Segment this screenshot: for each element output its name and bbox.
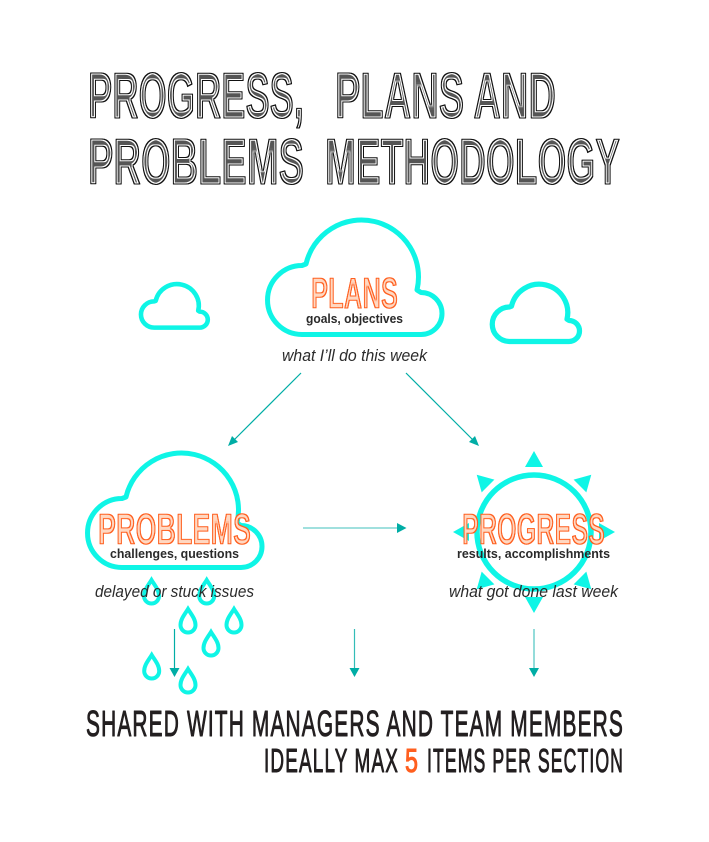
title: PLANS AND bbox=[335, 59, 556, 132]
title: PROBLEMS bbox=[88, 125, 304, 198]
title bbox=[88, 59, 620, 198]
arrow: plans to problems bbox=[228, 373, 301, 446]
progress description: what got done last week bbox=[449, 583, 619, 601]
icon: problems cloud bbox=[88, 453, 262, 568]
footer note: 5 bbox=[405, 742, 418, 779]
plans description: what I’ll do this week bbox=[282, 347, 428, 365]
footer note: IDEALLY MAX bbox=[264, 742, 399, 779]
progress subtitle: results, accomplishments bbox=[457, 547, 610, 561]
plans subtitle: goals, objectives bbox=[306, 312, 403, 326]
arrow: plans to progress bbox=[406, 373, 479, 446]
arrow: down from center bbox=[350, 629, 360, 677]
arrow: problems to progress bbox=[303, 523, 406, 533]
problems subtitle: challenges, questions bbox=[110, 547, 239, 561]
plans heading: PLANS bbox=[311, 269, 398, 318]
panel: progress bbox=[449, 451, 619, 613]
progress heading: PROGRESS bbox=[462, 505, 605, 554]
icon: small cloud left bbox=[141, 284, 208, 328]
problems heading: PROBLEMS bbox=[98, 505, 251, 554]
footer note bbox=[264, 742, 624, 779]
icon: rain drops bbox=[144, 580, 242, 692]
icon: sun bbox=[453, 451, 615, 613]
problems description: delayed or stuck issues bbox=[95, 583, 254, 601]
icon: plans cloud bbox=[268, 220, 442, 334]
arrow: down from progress bbox=[529, 629, 539, 677]
panel: plans bbox=[268, 220, 442, 365]
arrow: down from problems bbox=[170, 629, 180, 677]
title: PROGRESS, bbox=[88, 59, 304, 132]
icon: small cloud right bbox=[492, 284, 580, 341]
panel: problems bbox=[88, 453, 262, 692]
